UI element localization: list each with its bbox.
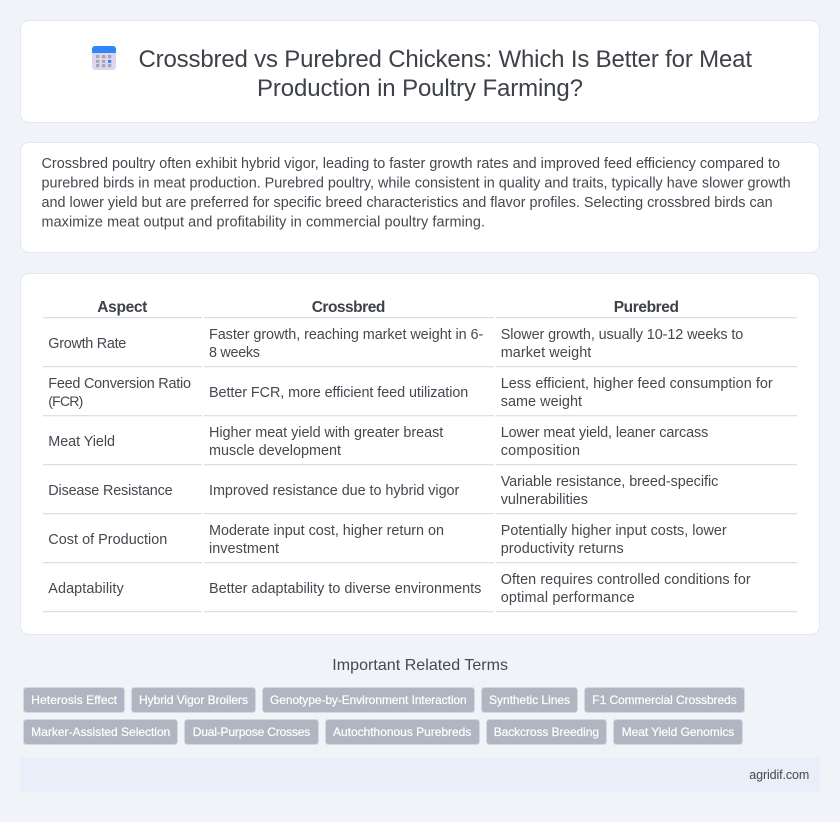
row: feed conversion ratio: Less efficient, higher feed consumption for — [501, 376, 773, 392]
footer: agridif.com — [749, 768, 809, 782]
row: cost of production: Potentially higher input costs, lower — [501, 523, 727, 539]
tags: related terms: Backcross Breeding — [494, 725, 599, 739]
footer — [20, 758, 820, 792]
text block: summary: Crossbred poultry often exhibit hybrid vigor, leading to faster growth rates and improved feed efficiency compared to — [42, 156, 780, 172]
tags: related terms: Marker-Assisted Selection — [31, 725, 170, 739]
row: growth rate: Slower growth, usually 10-12 weeks to — [501, 327, 743, 343]
title: Crossbred vs Purebred Chickens: Which Is Better for Meat — [138, 46, 752, 73]
panel: header — [20, 20, 820, 122]
row: cost of production: productivity returns — [501, 541, 624, 557]
row: feed conversion ratio: (FCR) — [48, 393, 83, 409]
title — [138, 46, 752, 102]
row: cost of production — [48, 523, 727, 557]
row: meat yield: composition — [501, 443, 580, 459]
tags: related terms — [24, 688, 744, 744]
row: growth rate: Growth Rate — [48, 336, 126, 352]
table header: Aspect — [97, 299, 147, 316]
tags: related terms: Dual-Purpose Crosses — [193, 725, 310, 739]
panel: comparison table — [20, 274, 820, 634]
row: growth rate: market weight — [501, 345, 591, 361]
row: growth rate: Faster growth, reaching market weight in 6- — [209, 327, 484, 343]
tags: related terms: Meat Yield Genomics — [622, 725, 734, 739]
row: meat yield: Lower meat yield, leaner carcass — [501, 425, 708, 441]
row: disease resistance: Improved resistance due to hybrid vigor — [209, 483, 460, 499]
heading: important related terms: Important Related Terms — [332, 657, 508, 674]
table header: Crossbred — [312, 299, 385, 316]
row: adaptability: Better adaptability to diverse environments — [209, 581, 481, 597]
row: meat yield — [48, 425, 708, 459]
text block: summary: maximize meat output and profitability in commercial poultry farming. — [42, 214, 485, 230]
row: cost of production: Moderate input cost, higher return on — [209, 523, 444, 539]
row: meat yield: Higher meat yield with greater breast — [209, 425, 443, 441]
table header — [97, 299, 679, 316]
tags: related terms: Autochthonous Purebreds — [333, 725, 471, 739]
row: feed conversion ratio: Better FCR, more efficient feed utilization — [209, 385, 468, 401]
row: growth rate — [48, 327, 743, 361]
tags: related terms: Synthetic Lines — [489, 693, 570, 707]
text block: summary: and lower yield but are preferred for specific breed characteristics and flavor profiles. Selecting crossbred birds can — [42, 195, 773, 211]
panel: summary paragraph — [20, 142, 820, 252]
row: cost of production: investment — [209, 541, 279, 557]
row: cost of production: Cost of Production — [48, 532, 167, 548]
row: adaptability — [48, 572, 751, 606]
text block: summary: purebred birds in meat production. Purebred poultry, while consistent in quality and traits, typically have slower growth — [42, 176, 791, 192]
row: disease resistance: vulnerabilities — [501, 492, 588, 508]
icon: calendar — [92, 46, 116, 70]
row: adaptability: optimal performance — [501, 590, 635, 606]
row: growth rate: 8 weeks — [209, 345, 260, 361]
row: feed conversion ratio — [48, 376, 773, 410]
row: feed conversion ratio: Feed Conversion Ratio — [48, 376, 191, 392]
row: disease resistance: Disease Resistance — [48, 483, 173, 499]
title: Production in Poultry Farming? — [257, 75, 583, 102]
table header: Purebred — [614, 299, 679, 316]
row: feed conversion ratio: same weight — [501, 394, 582, 410]
row: adaptability: Adaptability — [48, 581, 124, 597]
tags: related terms: F1 Commercial Crossbreds — [592, 693, 737, 707]
tags: related terms: Heterosis Effect — [31, 693, 118, 707]
row: disease resistance: Variable resistance, breed-specific — [501, 474, 718, 490]
tags: related terms: Genotype-by-Environment Interaction — [270, 693, 467, 707]
row: disease resistance — [48, 474, 718, 508]
row: adaptability: Often requires controlled conditions for — [501, 572, 751, 588]
text block: summary — [42, 156, 791, 230]
row: meat yield: muscle development — [209, 443, 341, 459]
tags: related terms: Hybrid Vigor Broilers — [139, 693, 248, 707]
row: meat yield: Meat Yield — [48, 434, 115, 450]
